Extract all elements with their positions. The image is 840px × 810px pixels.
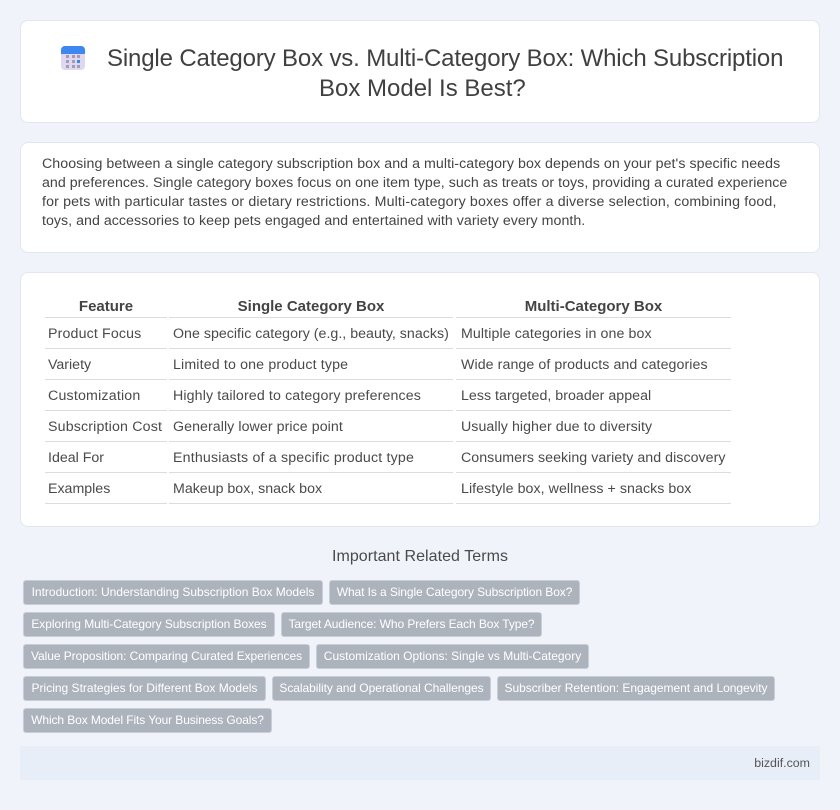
comparison table: Examples	[48, 481, 110, 497]
related term tags: Pricing Strategies for Different Box Models	[32, 681, 257, 695]
related term tags: Which Box Model Fits Your Business Goals?	[31, 713, 264, 727]
comparison table: Highly tailored to category preferences	[173, 388, 421, 404]
comparison table: Customization	[48, 388, 140, 404]
intro text	[42, 156, 787, 229]
comparison table: One specific category (e.g., beauty, snacks)	[173, 326, 449, 342]
title	[107, 45, 783, 102]
comparison table: Variety	[48, 357, 91, 373]
comparison table: Generally lower price point	[173, 419, 343, 435]
related term tags: Exploring Multi-Category Subscription Boxes	[31, 617, 267, 631]
column headings: Single Category Box	[238, 298, 384, 315]
comparison table: Multiple categories in one box	[461, 326, 652, 342]
comparison table: Ideal For	[48, 450, 104, 466]
intro text: Choosing between a single category subscription box and a multi-category box depends on your pet's specific needs	[42, 156, 780, 172]
comparison table: Less targeted, broader appeal	[461, 388, 651, 404]
column headings: Feature	[79, 298, 133, 315]
related term tags: Introduction: Understanding Subscription Box Models	[32, 585, 314, 599]
intro text: for pets with particular tastes or dietary restrictions. Multi-category boxes offer a diverse selection, combining food,	[42, 194, 777, 210]
heading: related terms: Important Related Terms	[332, 548, 508, 565]
comparison table: Wide range of products and categories	[461, 357, 708, 373]
column headings: Multi-Category Box	[525, 298, 662, 315]
comparison table: Enthusiasts of a specific product type	[173, 450, 414, 466]
panel: comparison table	[20, 272, 820, 527]
intro text: and preferences. Single category boxes focus on one item type, such as treats or toys, providing a curated experience	[42, 175, 787, 191]
related term tags	[23, 580, 775, 733]
related term tags: Target Audience: Who Prefers Each Box Type?	[288, 617, 535, 631]
column headings	[79, 298, 662, 315]
panel: title header	[20, 20, 820, 123]
title: Single Category Box vs. Multi-Category Box: Which Subscription	[107, 45, 783, 72]
comparison table: Consumers seeking variety and discovery	[461, 450, 726, 466]
related term tags: What Is a Single Category Subscription Box?	[337, 585, 572, 599]
panel: introduction	[20, 142, 820, 253]
icon: calendar box	[61, 46, 85, 70]
comparison table: Makeup box, snack box	[173, 481, 322, 497]
comparison table: Usually higher due to diversity	[461, 419, 652, 435]
footer source: bizdif.com	[754, 756, 810, 770]
comparison table: Limited to one product type	[173, 357, 348, 373]
comparison table	[45, 298, 731, 504]
footer bar	[20, 746, 820, 780]
intro text: toys, and accessories to keep pets engaged and entertained with variety every month.	[42, 213, 585, 229]
related term tags: Subscriber Retention: Engagement and Longevity	[504, 681, 768, 695]
comparison table: Product Focus	[48, 326, 141, 342]
comparison table: Subscription Cost	[48, 419, 162, 435]
related term tags: Scalability and Operational Challenges	[279, 681, 484, 695]
related term tags: Value Proposition: Comparing Curated Experiences	[31, 649, 302, 663]
related term tags: Customization Options: Single vs Multi-Category	[324, 649, 581, 663]
title: Box Model Is Best?	[319, 75, 526, 102]
comparison table: Lifestyle box, wellness + snacks box	[461, 481, 691, 497]
